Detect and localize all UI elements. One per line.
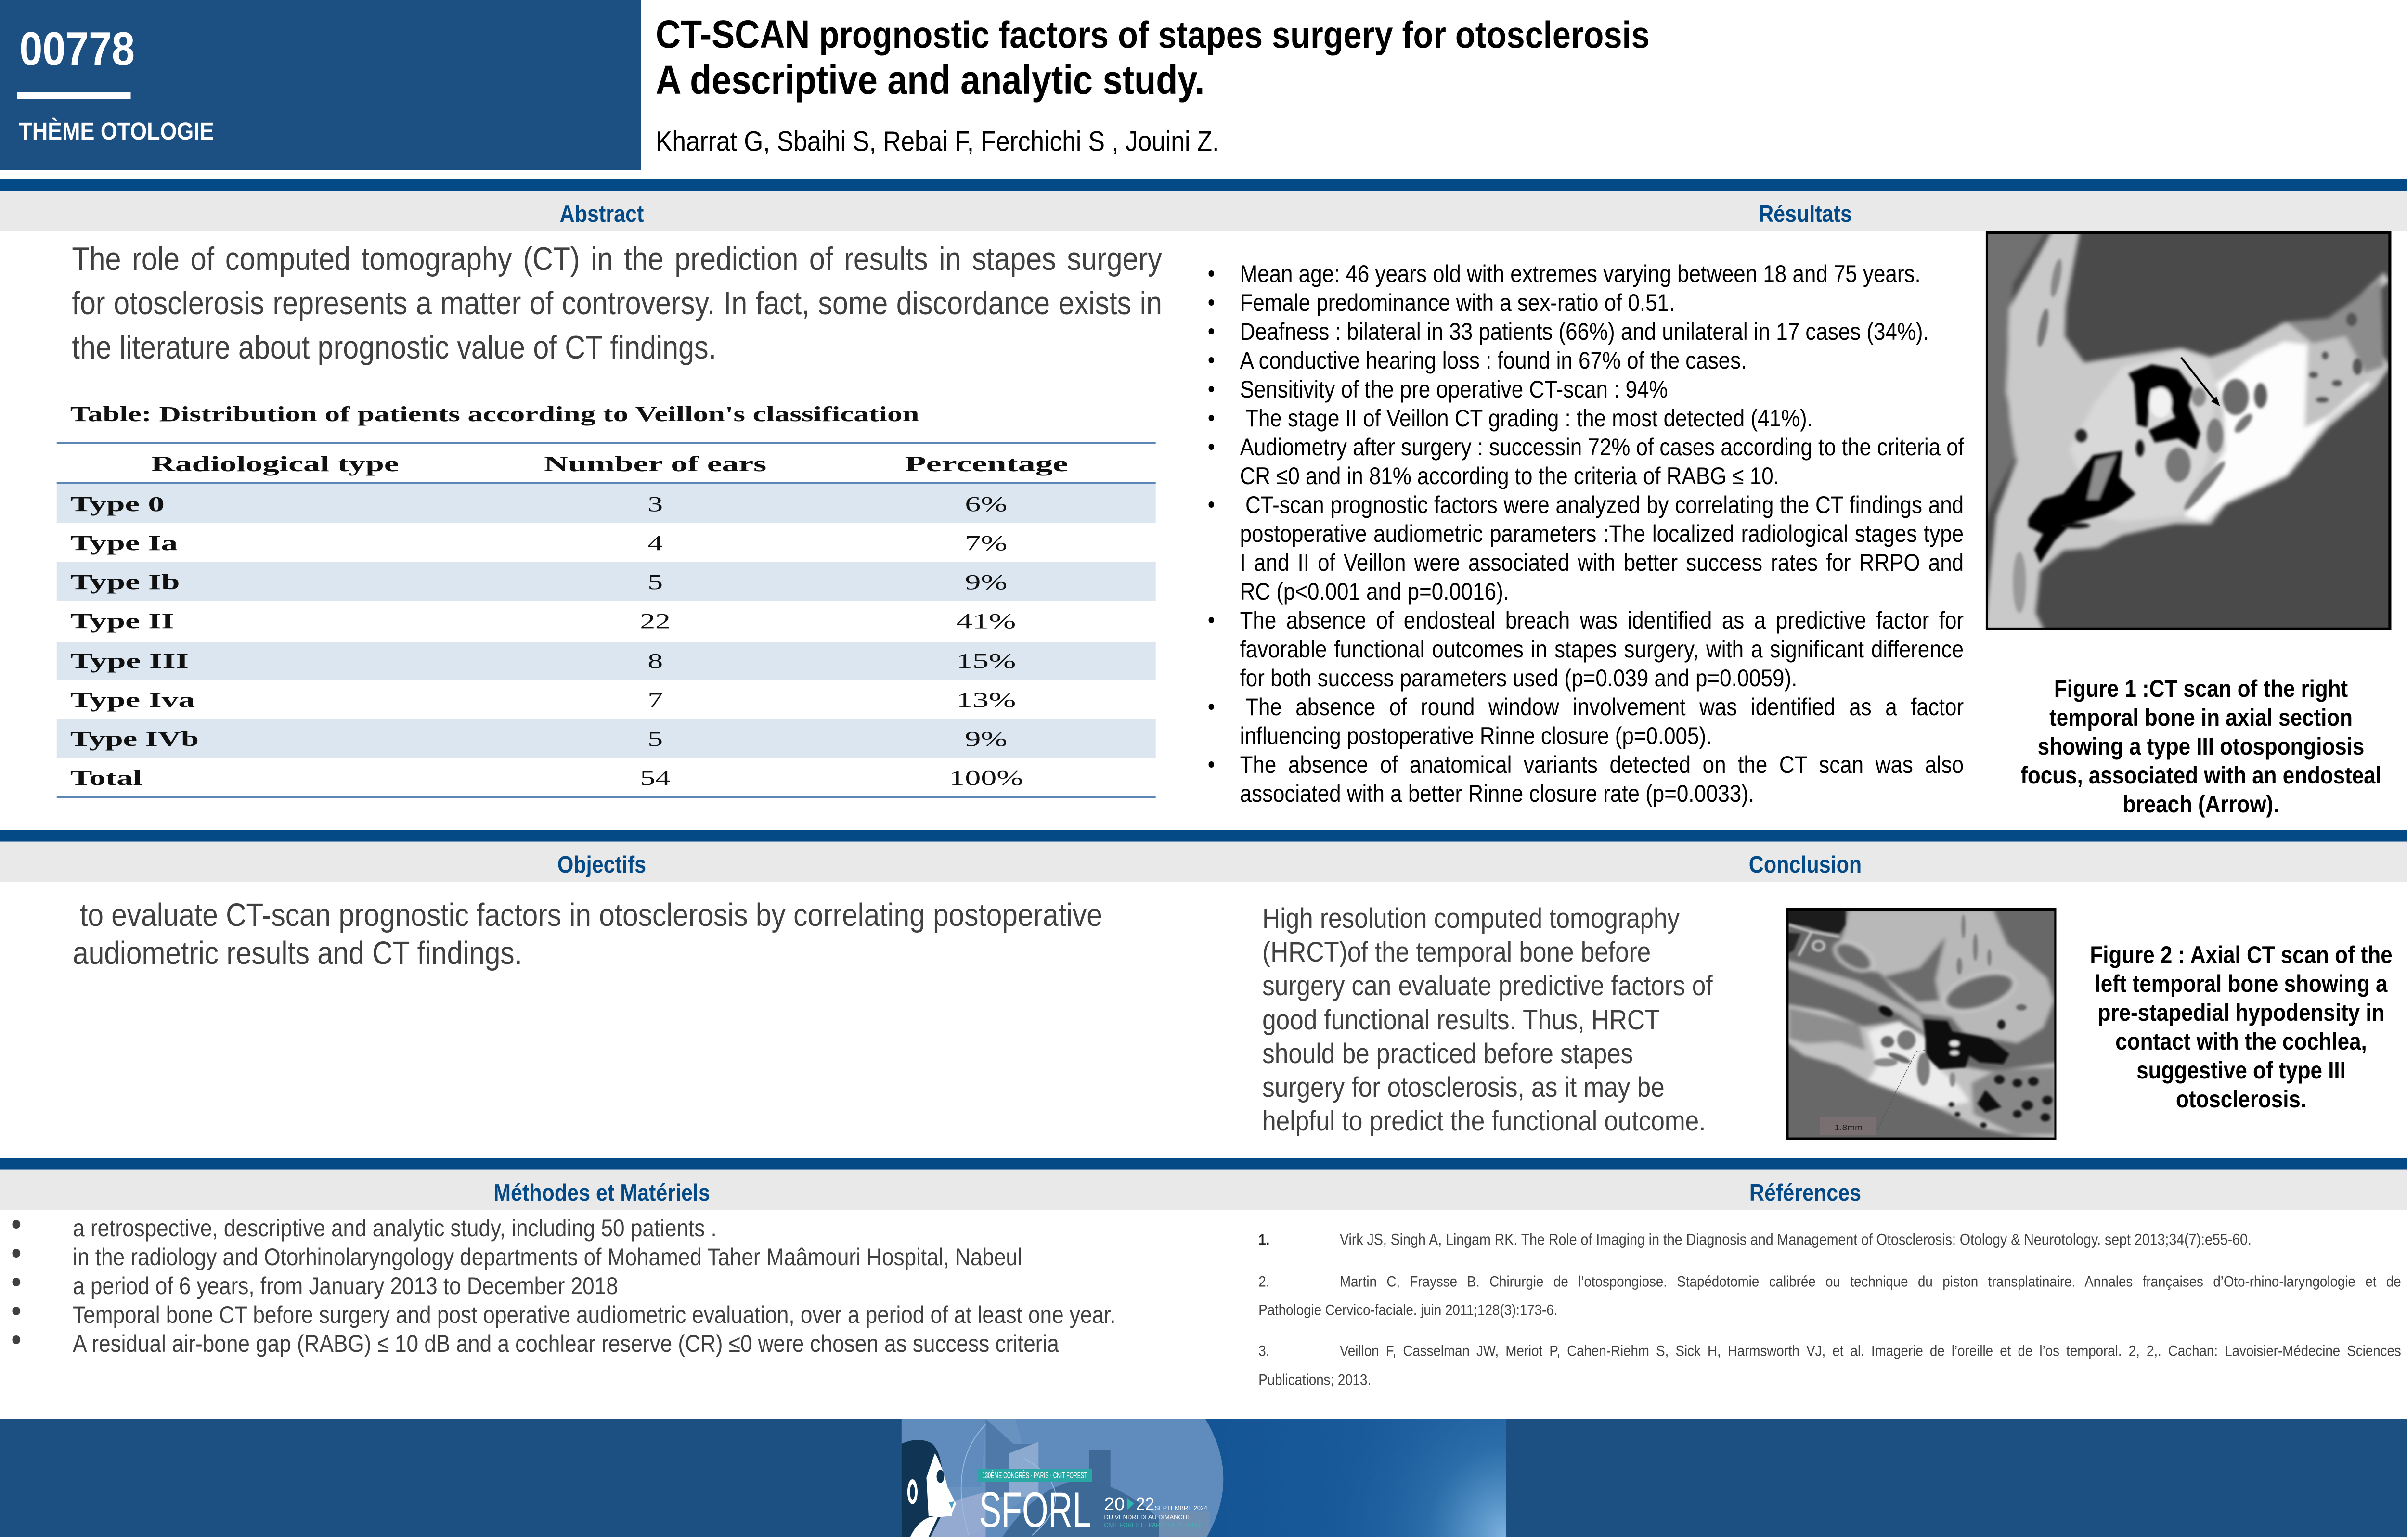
title line 1: CT-SCAN prognostic factors of stapes surgery for otosclerosis [656, 13, 1650, 56]
congress dates: 20 [1104, 1494, 1125, 1514]
results bullet list: Audiometry after surgery : successin 72% of cases according to the criteria of [1240, 434, 1964, 461]
number of ears column: 7 [647, 688, 663, 712]
number of ears column: 4 [647, 531, 663, 555]
results bullet list: for both success parameters used (p=0.039 and p=0.0059). [1240, 665, 1797, 692]
conclusion text: (HRCT)of the temporal bone before [1262, 937, 1651, 968]
results bullet list: The absence of anatomical variants detected on the CT scan was also [1240, 751, 1964, 778]
section header row: Méthodes et Matériels and Références [0, 1170, 2407, 1210]
conclusion text [1262, 902, 1740, 1138]
methods bullet list: a period of 6 years, from January 2013 to December 2018 [73, 1272, 618, 1299]
figure 1 caption: breach (Arrow). [2123, 791, 2279, 818]
results bullet list: Mean age: 46 years old with extremes varying between 18 and 75 years. [1240, 260, 1921, 287]
methods bullet list: a retrospective, descriptive and analytic study, including 50 patients . [73, 1215, 717, 1242]
number of ears column: 22 [640, 609, 671, 633]
results bullet list: favorable functional outcomes in stapes surgery, with a significant difference [1240, 636, 1964, 663]
radiological type column: Type II [70, 609, 174, 633]
photo circle with skyline [902, 1419, 1240, 1537]
heading: Résultats: Résultats [1759, 201, 1852, 227]
results bullet list: CR ≤0 and in 81% according to the criteria of RABG ≤ 10. [1240, 462, 1779, 489]
results bullet list: Female predominance with a sex-ratio of 0.51. [1240, 289, 1675, 316]
figure 1: CT scan of the right temporal bone [1985, 231, 2392, 630]
figure 1 caption: focus, associated with an endosteal [2020, 762, 2381, 789]
title line 2: A descriptive and analytic study. [656, 57, 1204, 103]
results bullet list: The absence of endosteal breach was identified as a predictive factor for [1240, 607, 1964, 634]
heading: Conclusion: Conclusion [1749, 852, 1862, 878]
results bullet list: postoperative audiometric parameters :The localized radiological stages type [1240, 520, 1964, 547]
methods bullet list: in the radiology and Otorhinolaryngology departments of Mohamed Taher Maâmouri Hospital, Nabeul [73, 1244, 1022, 1270]
heading: Références: Références [1749, 1180, 1861, 1206]
radiological type column: Type Ia [70, 531, 178, 555]
radiological type column: Type Ib [70, 570, 180, 594]
figure 1 caption: temporal bone in axial section [2049, 704, 2353, 731]
congress banner [902, 1419, 1506, 1537]
radiological type column: Type III [70, 649, 189, 673]
references list: 2. [1258, 1272, 1269, 1290]
results bullet list: Deafness : bilateral in 33 patients (66%) and unilateral in 17 cases (34%). [1240, 318, 1929, 345]
number of ears column: 54 [640, 766, 671, 790]
abstract text: for otosclerosis represents a matter of controversy. In fact, some discordance exists in [72, 285, 1162, 321]
figure 1 caption: showing a type III otospongiosis [2038, 733, 2364, 760]
figure 2 caption [2075, 940, 2407, 1114]
conclusion text: High resolution computed tomography [1262, 903, 1680, 934]
results bullet list: A conductive hearing loss : found in 67% of the cases. [1240, 347, 1747, 374]
percentage column: 9% [965, 570, 1007, 594]
table header cells: Number of ears [544, 452, 766, 476]
congress dates [1104, 1494, 1207, 1528]
heading: Abstract: Abstract [560, 201, 644, 227]
congress tag [978, 1469, 1092, 1482]
references list: Pathologie Cervico-faciale. juin 2011;128(3):173-6. [1258, 1301, 1557, 1318]
number of ears column: 3 [647, 492, 663, 516]
radiological type column: Type IVb [70, 727, 199, 751]
conclusion text: surgery for otosclerosis, as it may be [1262, 1072, 1665, 1103]
table header cells [151, 452, 1068, 476]
results bullet list: RC (p<0.001 and p=0.0016). [1240, 578, 1509, 605]
congress dates: DU VENDREDI AU DIMANCHE [1104, 1514, 1191, 1521]
conclusion text: good functional results. Thus, HRCT [1262, 1004, 1660, 1036]
results bullet list: The stage II of Veillon CT grading : the most detected (41%). [1245, 405, 1813, 432]
abstract number: 00778 [19, 22, 135, 75]
footer band [0, 1419, 2407, 1537]
radiological type column: Type Iva [70, 688, 195, 712]
figure 1 caption [2011, 674, 2391, 819]
abstract text: The role of computed tomography (CT) in the prediction of results in stapes surgery [72, 241, 1162, 277]
figure 1 caption: Figure 1 :CT scan of the right [2054, 675, 2348, 702]
percentage column: 41% [956, 609, 1016, 633]
SFORL logotype: SFORL [979, 1481, 1091, 1537]
references list [1204, 1210, 2407, 1419]
percentage column: 9% [965, 727, 1007, 751]
title block [656, 13, 1650, 157]
table caption: Table: Distribution of patients according to Veillon's classification [70, 402, 919, 426]
results bullet list [1209, 259, 1964, 810]
percentage column: 15% [956, 649, 1016, 673]
percentage column [949, 492, 1023, 790]
results bullet list: Sensitivity of the pre operative CT-scan : 94% [1240, 376, 1668, 403]
figure 2 caption: Figure 2 : Axial CT scan of the [2090, 941, 2393, 968]
objectifs text [73, 897, 1130, 973]
radiological type column: Type 0 [70, 492, 165, 516]
references list: Martin C, Fraysse B. Chirurgie de l’otospongiose. Stapédotomie calibrée ou technique du piston transplatinaire. Annales françaises d’Oto-rhino-laryngologie et de [1340, 1272, 2401, 1290]
congress dates: 22 [1136, 1494, 1154, 1514]
theme label: THÈME OTOLOGIE [19, 117, 214, 145]
percentage column: 100% [949, 766, 1023, 790]
methods bullet list: A residual air-bone gap (RABG) ≤ 10 dB and a cochlear reserve (CR) ≤0 were chosen as success criteria [73, 1330, 1059, 1357]
methods bullet list: Temporal bone CT before surgery and post operative audiometric evaluation, over a period of at least one year. [73, 1301, 1115, 1328]
figure 2: axial CT scan of the left temporal bone [1786, 908, 2057, 1140]
percentage column: 7% [965, 531, 1007, 555]
figure 2 caption: left temporal bone showing a [2095, 970, 2387, 997]
authors: Kharrat G, Sbaihi S, Rebai F, Ferchichi S , Jouini Z. [656, 126, 1219, 157]
abstract text: the literature about prognostic value of CT findings. [72, 330, 716, 366]
results bullet list: CT-scan prognostic factors were analyzed by correlating the CT findings and [1245, 491, 1964, 518]
figure 2 caption: pre-stapedial hypodensity in [2098, 999, 2384, 1026]
methods bullet list [12, 1214, 1154, 1358]
scale label [1820, 1117, 1876, 1135]
abstract text [72, 237, 1162, 370]
congress tag: 130ÈME CONGRÈS · PARIS · CNIT FOREST [982, 1470, 1087, 1480]
section header row: Abstract and Résultats [0, 191, 2407, 231]
references list: 1. [1258, 1231, 1269, 1248]
objectifs text: audiometric results and CT findings. [73, 936, 522, 971]
percentage column: 6% [965, 492, 1007, 516]
results bullet list: I and II of Veillon were associated with better success rates for RRPO and [1240, 549, 1964, 576]
number of ears column: 8 [647, 649, 663, 673]
white accent rule [17, 92, 131, 99]
conclusion text: should be practiced before stapes [1262, 1038, 1633, 1069]
results bullet list: associated with a better Rinne closure rate (p=0.0033). [1240, 780, 1754, 807]
figure 2 caption: otosclerosis. [2176, 1086, 2306, 1113]
section header row: Objectifs and Conclusion [0, 842, 2407, 882]
results bullet list: influencing postoperative Rinne closure (p=0.005). [1240, 722, 1712, 749]
results bullet list: The absence of round window involvement was identified as a factor [1245, 693, 1964, 720]
conclusion text: helpful to predict the functional outcome. [1262, 1105, 1706, 1137]
icon: arrow [2181, 358, 2220, 406]
number of ears column: 5 [647, 727, 663, 751]
table header cells: Percentage [905, 452, 1068, 476]
heading: Méthodes et Matériels: Méthodes et Matériels [493, 1180, 710, 1206]
conclusion text: surgery can evaluate predictive factors of [1262, 970, 1713, 1001]
references list: 3. [1258, 1342, 1269, 1359]
table row stripes [57, 484, 1156, 758]
congress dates: SEPTEMBRE 2024 [1155, 1504, 1207, 1512]
table: distribution of patients according to Veillon's classification [55, 395, 1159, 804]
figure 2 caption: contact with the cochlea, [2115, 1028, 2367, 1055]
radiological type column: Total [70, 766, 142, 790]
references list: Publications; 2013. [1258, 1371, 1371, 1388]
references list: Virk JS, Singh A, Lingam RK. The Role of Imaging in the Diagnosis and Management of Otosclerosis: Otology & Neurotology. sept 2013;34(7):e55-60. [1340, 1231, 2252, 1248]
congress dates: CNIT FOREST · PARIS LA DÉFENSE [1104, 1521, 1204, 1528]
heading: Objectifs: Objectifs [557, 852, 646, 878]
scale label: 1.8mm [1835, 1123, 1863, 1132]
radiological type column [70, 492, 199, 790]
table header cells: Radiological type [151, 452, 399, 476]
figure 2 caption: suggestive of type III [2136, 1057, 2346, 1084]
percentage column: 13% [956, 688, 1016, 712]
measurement line [1877, 1051, 1926, 1130]
header: abstract number and theme [0, 0, 641, 170]
number of ears column [640, 492, 671, 790]
objectifs text: to evaluate CT-scan prognostic factors in otosclerosis by correlating postoperative [80, 898, 1102, 933]
number of ears column: 5 [647, 570, 663, 594]
references list: Veillon F, Casselman JW, Meriot P, Cahen-Riehm S, Sick H, Harmsworth VJ, et al. Imagerie de l’oreille et de l’os temporal. 2, 2,. Cachan: Lavoisier-Médecine Sciences [1340, 1342, 2401, 1359]
icon: face profile [902, 1440, 956, 1537]
